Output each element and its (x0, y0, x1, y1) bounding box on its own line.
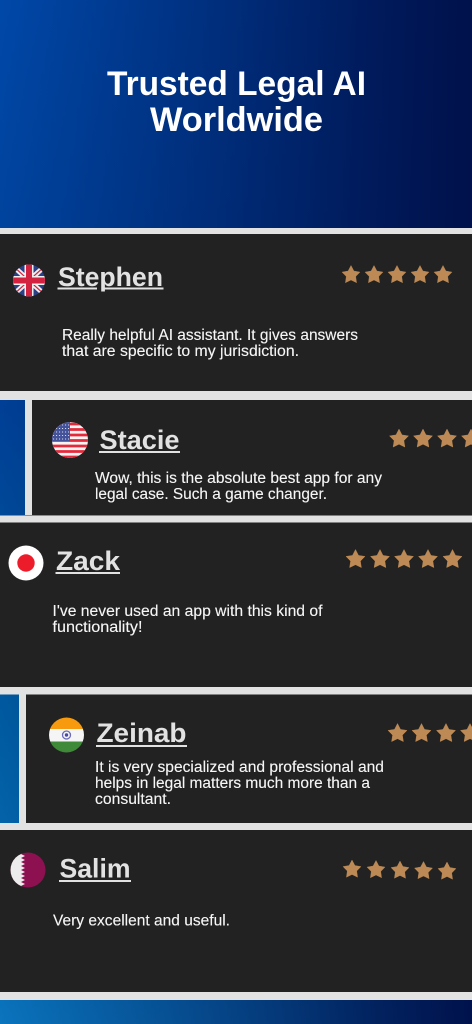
panel: Zack review (0, 516, 472, 694)
title: Worldwide (150, 101, 323, 139)
rating: stars cut off at edge (388, 724, 472, 742)
icon: US flag (52, 422, 88, 458)
review text: Really helpful AI assistant. It gives answers (62, 327, 358, 344)
panel: Zeinab review (19, 694, 472, 823)
review text: functionality! (52, 619, 142, 636)
review text: consultant. (95, 791, 171, 808)
review text: Very excellent and useful. (53, 912, 230, 930)
review text (95, 759, 384, 808)
icon: Qatar flag (10, 852, 46, 888)
rating: five stars (346, 550, 462, 568)
rating: five stars (342, 266, 452, 283)
icon: India flag (49, 717, 84, 754)
review text: legal case. Such a game changer. (95, 486, 327, 503)
icon: Japan flag (8, 546, 44, 580)
name: Salim: Salim (60, 854, 130, 884)
rating: five stars (343, 860, 456, 879)
review text (95, 470, 382, 503)
review text (62, 327, 358, 360)
review text (52, 603, 323, 636)
icon: UK flag (13, 264, 45, 297)
name: Zeinab: Zeinab (96, 718, 186, 748)
name: Stacie: Stacie (100, 425, 180, 455)
title (107, 65, 366, 139)
panel: Stephen review (0, 228, 472, 400)
panel: Stacie review (25, 400, 472, 515)
review text: It is very specialized and professional and (95, 759, 384, 776)
review text: Wow, this is the absolute best app for any (95, 470, 382, 487)
review text: that are specific to my jurisdiction. (62, 343, 299, 360)
review text: I've never used an app with this kind of (52, 603, 323, 620)
name: Zack: Zack (56, 546, 120, 576)
rating: stars cut off at edge (390, 429, 472, 447)
title: Trusted Legal AI (107, 65, 366, 103)
name: Stephen: Stephen (58, 262, 163, 292)
review text: helps in legal matters much more than a (95, 775, 370, 792)
panel: Salim review (0, 823, 472, 1000)
